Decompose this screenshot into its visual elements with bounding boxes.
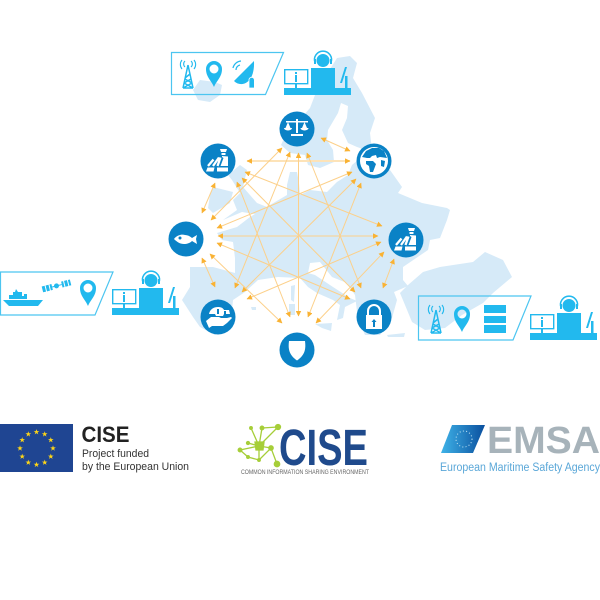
logo: EU CISE (0, 422, 189, 473)
panel: right sensors (418, 296, 531, 340)
logo: EU CISE: CISE (82, 422, 130, 447)
icon: data stack (484, 305, 506, 333)
panel: left sensors (0, 272, 113, 315)
logo: EMSA (440, 420, 600, 474)
icon: ship (3, 289, 43, 306)
network arrows (202, 138, 394, 323)
workstation left (112, 271, 179, 315)
logo: CISE common information sharing environment: COMMON INFORMATION SHARING ENVIRONMENT (241, 470, 369, 476)
icon: location pin right (454, 306, 470, 332)
node: police officer right (388, 222, 424, 258)
workstation right (530, 296, 597, 340)
icon: location pin left (80, 280, 96, 306)
icon: satellite dish (233, 61, 254, 88)
logo: EU CISE: Project funded (82, 448, 149, 460)
node: fish (168, 222, 204, 256)
icon: antenna tower right (428, 305, 444, 333)
logo: CISE common information sharing environment (238, 419, 369, 476)
map of Europe (182, 56, 512, 337)
network mark (238, 424, 280, 467)
node: padlock (356, 300, 392, 334)
node: shield (280, 332, 314, 368)
node: rescue hand (200, 300, 236, 334)
node: justice scales (280, 112, 314, 146)
EU stars (17, 429, 56, 467)
icon: satellite (42, 279, 71, 292)
panel: top sensors (172, 52, 284, 94)
logo: EMSA: EMSA (487, 420, 600, 462)
logo: EU CISE: by the European Union (82, 461, 189, 473)
icon: antenna tower (180, 60, 196, 88)
node: police officer left (200, 144, 236, 178)
node: globe (356, 144, 392, 178)
icon: location pin top (206, 61, 222, 87)
logo: CISE common information sharing environment: CISE (279, 419, 368, 476)
workstation top (284, 51, 351, 95)
